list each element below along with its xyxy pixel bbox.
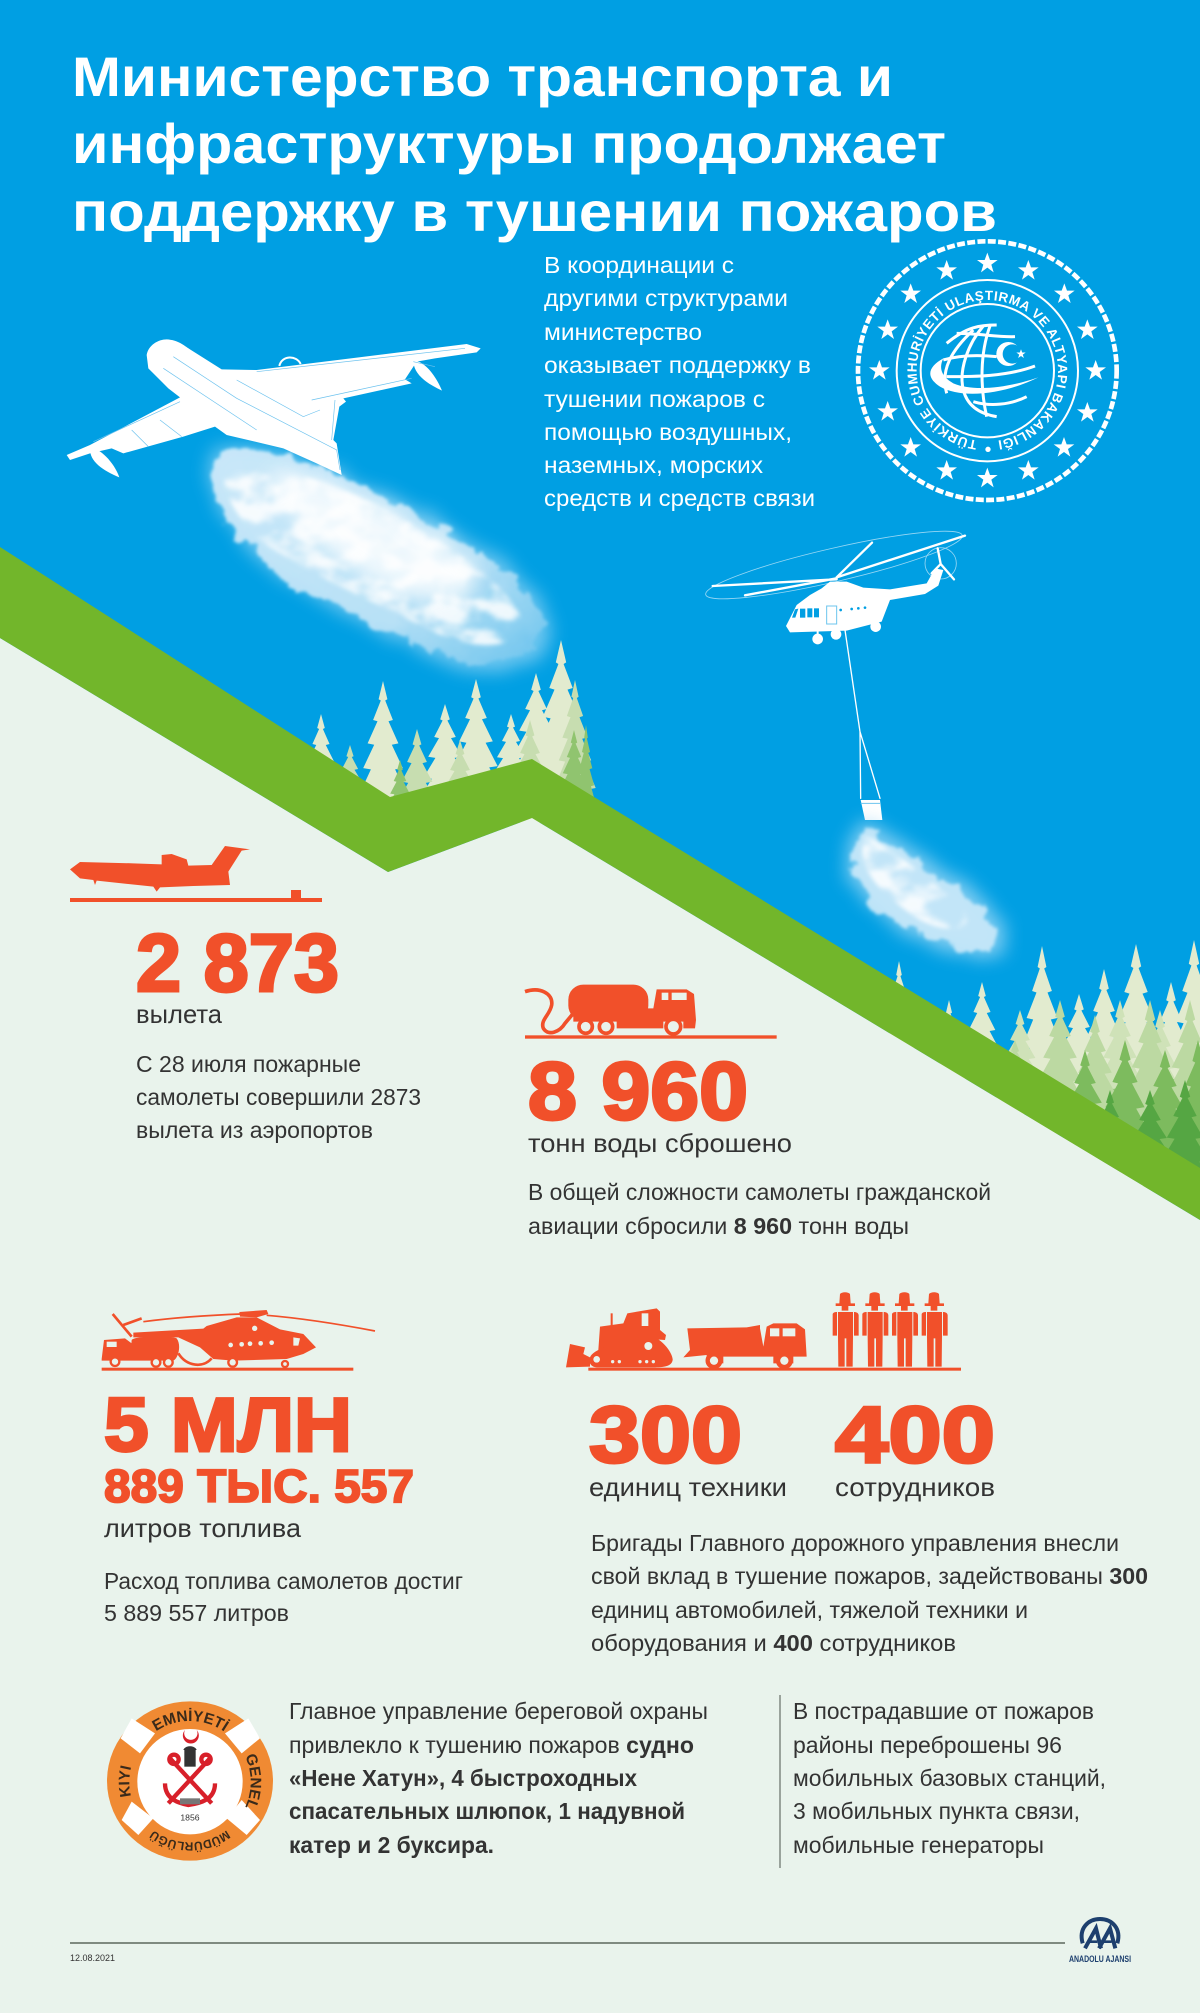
intro paragraph: министерство [544, 319, 702, 345]
coast guard emblem: MÜDÜRLÜĞÜ [149, 1830, 230, 1852]
communications text: районы переброшены 96 [793, 1732, 1062, 1758]
stat: fuel: Расход топлива самолетов достиг [104, 1568, 463, 1594]
title: Министерство транспорта и [72, 45, 893, 108]
stat: water dropped: 8 960 [528, 1046, 748, 1137]
Anadolu Agency logo: ANADOLU AJANSI [1069, 1954, 1131, 1964]
stat: vehicles and staff: единиц автомобилей, тяжелой техники и [591, 1597, 1028, 1623]
communications text: мобильных базовых станций, [793, 1765, 1106, 1791]
ministry seal: TÜRKİYE CUMHURİYETİ ULAŞTIRMA VE ALTYAPI BAKANLIĞI [907, 290, 1068, 450]
stat: flights: вылета [136, 999, 223, 1029]
coast guard text: катер и 2 буксира. [289, 1832, 494, 1858]
stat: flights: вылета из аэропортов [136, 1117, 373, 1143]
coast guard emblem [107, 1701, 273, 1861]
light ground panel [0, 638, 1200, 2013]
water cloud from plane [212, 445, 552, 671]
plane [67, 339, 481, 477]
intro paragraph: наземных, морских [544, 452, 764, 478]
intro paragraph: помощью воздушных, [544, 419, 792, 445]
communications text: В пострадавшие от пожаров [793, 1698, 1094, 1724]
helicopter with bucket [702, 519, 966, 820]
stat: vehicles and staff: свой вклад в тушение пожаров, задействованы 300 [591, 1563, 1148, 1589]
sky background [0, 0, 1200, 1225]
intro paragraph: средств и средств связи [544, 485, 815, 511]
title: инфраструктуры продолжает [72, 112, 946, 175]
title: поддержку в тушении пожаров [72, 180, 997, 243]
communications text: 3 мобильных пункта связи, [793, 1798, 1080, 1824]
stat: flights: 2 873 [136, 918, 339, 1009]
stat: fuel: 5 889 557 литров [104, 1600, 289, 1626]
stat: vehicles and staff: сотрудников [835, 1472, 995, 1502]
stat: water dropped [528, 1046, 991, 1239]
stat: flights: самолеты совершили 2873 [136, 1084, 421, 1110]
intro paragraph: В координации с [544, 252, 734, 278]
coast guard emblem: KIYI [118, 1766, 131, 1797]
stat: vehicles and staff: 400 [835, 1390, 995, 1479]
stat: fuel: литров топлива [104, 1513, 302, 1543]
Anadolu Agency logo [1069, 1919, 1131, 1964]
stat: vehicles and staff [589, 1390, 1148, 1656]
stat: fuel: 889 ТЫС. 557 [104, 1460, 414, 1512]
ministry seal [856, 239, 1119, 502]
coast guard text: «Нене Хатун», 4 быстроходных [289, 1765, 637, 1791]
intro paragraph: оказывает поддержку в [544, 352, 811, 378]
trees: right cluster [883, 940, 1200, 1200]
coast guard emblem: 1856 [180, 1813, 200, 1823]
icon: plane on runway [70, 846, 322, 902]
stat: water dropped: В общей сложности самолеты гражданской [528, 1179, 991, 1205]
stat: water dropped: тонн воды сброшено [528, 1128, 792, 1158]
stat: vehicles and staff: единиц техники [589, 1472, 787, 1502]
stat: vehicles and staff: 300 [589, 1390, 742, 1479]
date: 12.08.2021 [70, 1953, 115, 1963]
coast guard emblem: EMNİYETİ [152, 1708, 230, 1732]
water cloud from bucket [845, 820, 1006, 960]
stat: water dropped: авиации сбросили 8 960 тонн воды [528, 1213, 909, 1239]
icon: fuel truck and helicopter [102, 1310, 375, 1371]
coast guard emblem: GENEL [245, 1754, 262, 1808]
intro paragraph: тушении пожаров с [544, 386, 765, 412]
icon: tanker truck [525, 985, 777, 1039]
coast guard text [289, 1698, 708, 1858]
stat: fuel [104, 1383, 463, 1626]
coast guard text: привлекло к тушению пожаров судно [289, 1732, 694, 1758]
title [72, 45, 997, 243]
communications text [793, 1698, 1106, 1858]
coast guard text: Главное управление береговой охраны [289, 1698, 708, 1724]
icon: bulldozer, truck, workers [566, 1292, 961, 1371]
trees: left cluster [299, 640, 596, 840]
coast guard text: спасательных шлюпок, 1 надувной [289, 1798, 685, 1824]
stat: flights: С 28 июля пожарные [136, 1051, 361, 1077]
stat: flights [136, 918, 421, 1143]
stat: fuel: 5 МЛН [104, 1383, 352, 1468]
stat: vehicles and staff: оборудования и 400 сотрудников [591, 1630, 956, 1656]
communications text: мобильные генераторы [793, 1832, 1044, 1858]
intro paragraph [544, 252, 815, 511]
green slope band [0, 547, 1200, 1220]
stat: vehicles and staff: Бригады Главного дорожного управления внесли [591, 1530, 1119, 1556]
intro paragraph: другими структурами [544, 285, 788, 311]
